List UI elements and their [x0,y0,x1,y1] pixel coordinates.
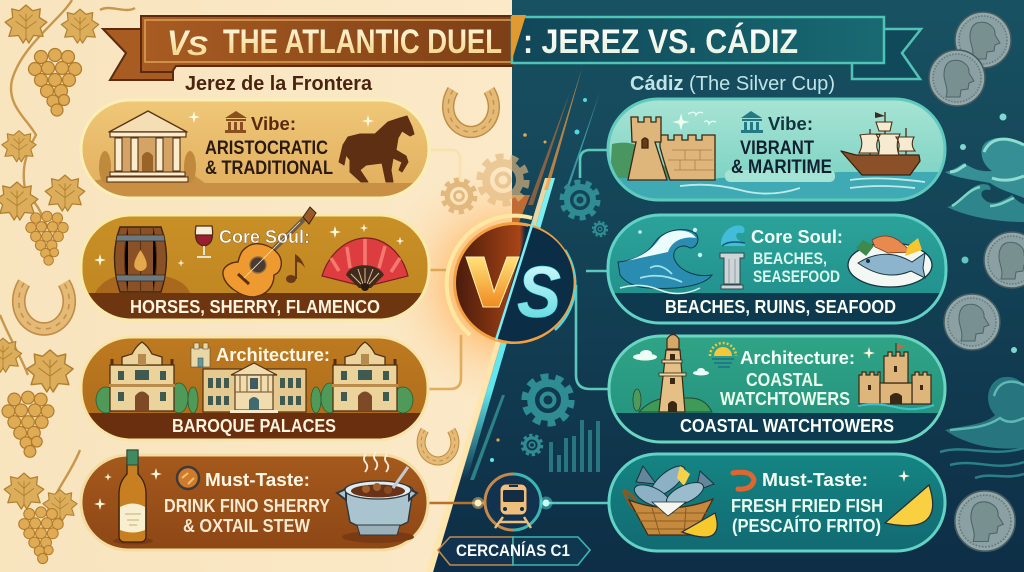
icon: barrel [114,227,166,292]
icon: lemon wedge large [885,485,933,526]
text: drink fino sherry and oxtail stew [164,495,331,536]
center glow: left side [405,180,512,388]
left decoration: gears [443,157,526,212]
text: aristocratic and traditional: ARISTOCRATIC [205,138,328,159]
icon: seafood plate [848,236,932,287]
ribbon tail right [852,29,921,79]
gold divider [512,15,526,60]
text: vibrant and maritime: & MARITIME [731,157,832,178]
label: Vibe: Vibe: [768,114,813,134]
text: beaches seasefood: SEASEFOOD [753,268,840,286]
label: Core Soul: Core Soul: [751,227,843,247]
text: fresh fried fish: FRESH FRIED FISH [731,495,883,516]
text: coastal watchtowers strip: COASTAL WATCHTOWERS [680,415,894,436]
text: aristocratic and traditional: & TRADITIONAL [205,158,333,179]
icon: horse [339,116,414,182]
icon: shrimp [733,472,754,489]
sparkle [863,347,875,359]
text: beaches seasefood [753,250,840,286]
text: beaches seasefood: BEACHES, [753,250,827,268]
icon: left palace [109,342,175,411]
text: fresh fried fish [731,495,883,536]
title right: : JEREZ VS. CÁDIZ [523,23,798,61]
label: Vibe: Vibe: [251,114,296,134]
panel: Jerez must-taste [81,450,428,550]
ribbon tail left [103,29,173,80]
VS letters: S [517,253,561,333]
text: drink fino sherry and oxtail stew: & OXTAIL STEW [183,515,310,536]
route label: Cercanías C1: CERCANÍAS C1 [456,541,570,560]
icon: sailing ship [841,112,920,175]
VS medallion [447,216,575,344]
text: drink fino sherry and oxtail stew: DRINK FINO SHERRY [164,495,331,516]
sparkles [94,224,404,267]
panel: Cádiz core soul [600,215,950,325]
connectors [428,150,609,503]
icon: guitar [223,207,316,297]
label: Must-Taste: Must-Taste: [762,470,868,490]
icon: wine glass [195,226,213,257]
icon: food plate [177,467,199,489]
label: Architecture: Architecture: [740,348,855,368]
text: vibrant and maritime: VIBRANT [740,138,814,159]
icon: right palace [332,342,398,411]
icon: fish basket [624,461,714,535]
center streaks [426,68,600,572]
text: baroque palaces: BAROQUE PALACES [172,415,336,436]
panel: Jerez architecture [80,337,430,441]
train badge [472,474,552,530]
title VS mark: V [167,24,190,63]
icon: fan [322,238,408,291]
text: coastal watchtowers: COASTAL [746,369,823,390]
label: Architecture: Architecture: [216,345,330,365]
right heading: Cádiz (The Silver Cup) [630,73,835,95]
icon: trees [96,383,413,413]
text: coastal watchtowers [720,369,850,409]
panel: Cádiz vibe [600,99,945,205]
panel: Cádiz must-taste [609,454,945,551]
icon: sun over sea [710,343,736,367]
text: beaches ruins seafood: BEACHES, RUINS, SEAFOOD [665,296,896,317]
banner right half [512,17,884,63]
title VS mark [167,24,208,63]
label: Must-Taste: Must-Taste: [205,470,310,490]
text: fresh fried fish: (PESCAÍTO FRITO) [732,515,881,536]
panel: Jerez vibe [80,100,430,200]
icon: small temple [225,111,247,133]
icon: small temple [741,111,763,133]
icon: lighthouse [633,334,712,412]
panel: Cádiz architecture [600,334,950,443]
sparkles [94,468,162,510]
text: horses sherry flamenco: HORSES, SHERRY, FLAMENCO [130,296,380,317]
title VS mark: S [187,31,208,61]
title banner [103,15,921,80]
text: coastal watchtowers: WATCHTOWERS [720,388,850,409]
right decoration: gears and data bars [522,182,607,472]
icon: sand castle [858,343,934,409]
left decoration: horseshoes [19,90,494,461]
icon: clouds [633,350,709,376]
icon: seagulls and sparkle [675,112,716,128]
banner left half [141,16,512,72]
icon: big wave [618,228,712,294]
left decoration: vines, leaves and grapes [0,0,135,564]
left heading: Jerez de la Frontera [185,73,373,95]
icon: small wave [721,225,745,246]
glow nodes [472,496,552,510]
icon: train [495,484,531,528]
text: vibrant and maritime [731,138,832,178]
icon: column [720,253,744,289]
icon: temple [99,111,196,183]
sparkle [898,470,910,482]
icon: music note [286,254,305,283]
right decoration: waves [940,114,1024,478]
background: left sherry side [0,0,512,572]
sparkles [188,111,374,127]
icon: small castle [191,343,210,367]
icon: stew pot [337,452,417,543]
icon: castle wall [628,117,715,180]
title left: THE ATLANTIC DUEL [223,23,502,61]
route label: Cercanías C1 [438,537,590,565]
text: aristocratic and traditional [205,138,333,179]
label: Core Soul: Core Soul: [219,227,310,247]
icon: sherry bottle [113,450,153,544]
icon: lemon wedge small [682,513,717,537]
right decoration: coins [929,12,1024,551]
panel: Jerez core soul [80,207,430,321]
icon: center palace [203,363,306,413]
